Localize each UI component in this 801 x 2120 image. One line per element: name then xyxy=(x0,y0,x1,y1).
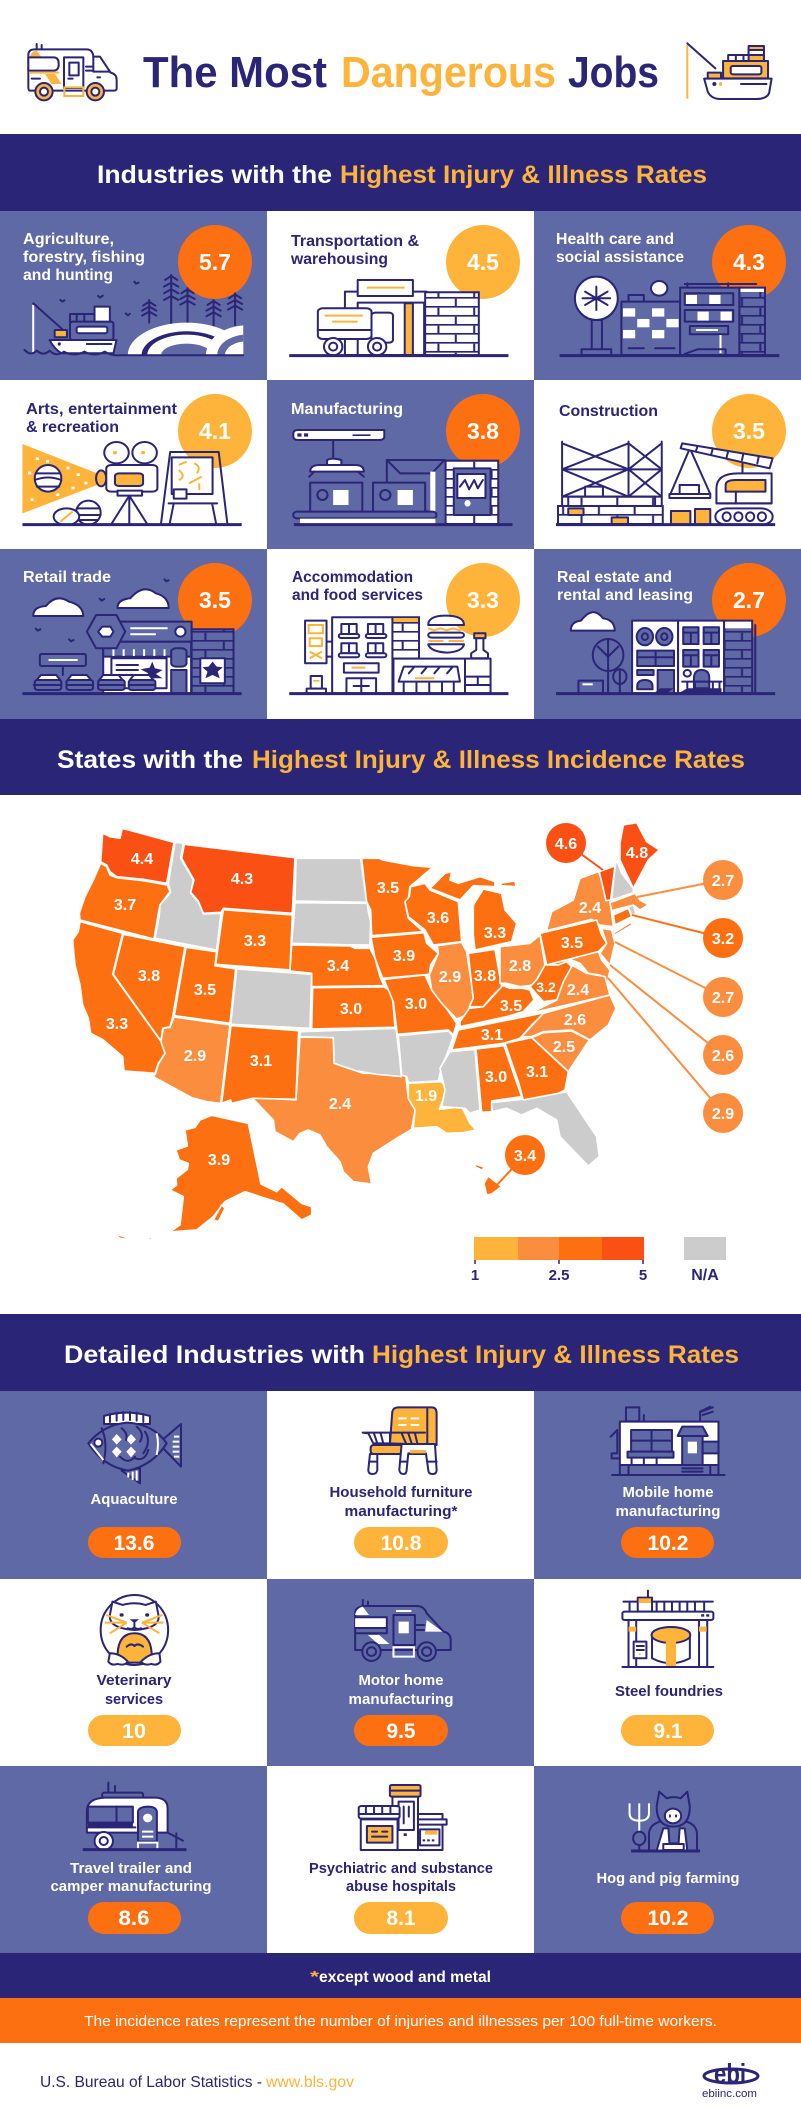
footnote band xyxy=(0,1953,801,1998)
state rate labels: 3.1 xyxy=(250,1053,272,1070)
state rate labels xyxy=(106,845,648,1169)
state rate labels: 3.5 xyxy=(561,935,583,952)
panel: household furniture manufacturing: manufacturing* xyxy=(344,1503,458,1520)
footnote band: * xyxy=(310,1969,320,1986)
callouts for small states: 2.7 xyxy=(712,990,734,1007)
panel: aquaculture xyxy=(0,1391,267,1579)
panel: real estate and rental and leasing: Real estate and xyxy=(557,569,672,586)
icon: movie camera, ball and easel xyxy=(22,442,242,525)
panel: mobile home manufacturing: manufacturing xyxy=(616,1503,720,1520)
title: Dangerous xyxy=(341,48,556,97)
source: U.S. Bureau of Labor Statistics - xyxy=(40,2074,262,2091)
icon: fishing boat xyxy=(687,43,772,99)
panel: arts, entertainment and recreation: & recreation xyxy=(26,419,119,436)
heading: states: States with the xyxy=(57,746,243,774)
panel: veterinary services xyxy=(88,1595,181,1746)
state rate labels: 3.3 xyxy=(484,925,506,942)
panel: transportation and warehousing xyxy=(289,225,520,356)
panel: real estate and rental and leasing: rental and leasing xyxy=(557,587,693,604)
panel: retail trade xyxy=(0,549,267,719)
state rate labels: 3.9 xyxy=(208,1152,230,1169)
pill: 9.1: 9.1 xyxy=(654,1720,683,1743)
state rate labels: 2.4 xyxy=(329,1096,351,1113)
panel: motor home manufacturing: manufacturing xyxy=(348,1691,454,1708)
state rate labels: 2.4 xyxy=(579,900,601,917)
icon: pill bottles xyxy=(359,1785,447,1850)
state rate labels: 4.3 xyxy=(231,871,253,888)
icon: apartment buildings xyxy=(556,612,775,694)
icon: mobile home xyxy=(611,1407,725,1475)
pill: 9.1 xyxy=(621,1715,714,1746)
panel: transportation and warehousing: 4.5 xyxy=(467,249,499,275)
panel: accommodation and food services: Accommodation xyxy=(292,569,413,586)
icon: scaffold and excavator xyxy=(556,442,775,525)
panel: household furniture manufacturing xyxy=(330,1407,472,1558)
panel: hog and pig farming xyxy=(534,1766,801,1953)
panel: real estate and rental and leasing xyxy=(534,549,801,719)
panel: health care and social assistance: social assistance xyxy=(556,249,684,266)
panel: health care and social assistance: 4.3 xyxy=(733,249,765,275)
panel: motor home manufacturing xyxy=(267,1579,534,1766)
icon: hotel and restaurant xyxy=(289,616,508,694)
panel: health care and social assistance: Health care and xyxy=(556,231,674,248)
panel: household furniture manufacturing: Household furniture xyxy=(330,1484,472,1501)
state rate labels: 3.1 xyxy=(481,1027,503,1044)
panel: agriculture, forestry, fishing and hunting: Agriculture, xyxy=(23,231,114,248)
panel: arts, entertainment and recreation: Arts, entertainment xyxy=(26,401,178,418)
state rate labels: 3.5 xyxy=(500,998,522,1015)
state rate labels: 3.0 xyxy=(485,1069,507,1086)
legend: N/A xyxy=(691,1267,719,1284)
footnote band: except wood and metal xyxy=(319,1969,491,1986)
heading: detailed industries: Detailed Industries with xyxy=(64,1341,365,1369)
icon: motor home xyxy=(355,1600,451,1661)
panel: agriculture, forestry, fishing and hunting xyxy=(0,211,288,380)
icon: travel trailer xyxy=(83,1783,187,1850)
icon: pig with pitchfork xyxy=(630,1792,700,1851)
panel: travel trailer and camper manufacturing: Travel trailer and xyxy=(70,1860,192,1877)
heading: industries: Industries with the xyxy=(97,161,332,189)
pill: 10.8: 10.8 xyxy=(380,1532,422,1555)
source: www.bls.gov xyxy=(265,2074,354,2091)
panel: psychiatric and substance abuse hospitals: abuse hospitals xyxy=(346,1878,456,1895)
note band xyxy=(0,1998,801,2043)
panel: steel foundries xyxy=(615,1591,723,1746)
state rate labels: 3.5 xyxy=(377,880,399,897)
state rate labels: 1.9 xyxy=(415,1088,437,1105)
icon: foundry crucible xyxy=(622,1591,713,1667)
panel: agriculture, forestry, fishing and hunting: and hunting xyxy=(23,267,113,284)
title: Jobs xyxy=(568,48,659,97)
callouts for small states: 3.4 xyxy=(514,1148,536,1165)
logo: ebi: ebi xyxy=(714,2058,746,2089)
callouts for small states: 4.6 xyxy=(555,836,577,853)
pill: 9.5 xyxy=(354,1715,448,1746)
state rate labels: 3.9 xyxy=(393,948,415,965)
panel: construction xyxy=(556,394,786,525)
pill: 10.2 xyxy=(621,1527,714,1558)
icon: fish xyxy=(88,1412,181,1483)
icon: chair xyxy=(363,1407,437,1474)
state rate labels: 3.4 xyxy=(327,958,349,975)
state rate labels: 3.3 xyxy=(244,933,266,950)
panel: retail trade: Retail trade xyxy=(23,569,111,586)
heading: industries xyxy=(0,134,801,211)
panel: construction: Construction xyxy=(559,403,658,420)
callouts for small states: 2.6 xyxy=(712,1048,734,1065)
state rate labels: 3.2 xyxy=(536,979,556,995)
pill: 10.8 xyxy=(354,1527,448,1558)
panel: health care and social assistance xyxy=(534,211,801,380)
state rate labels: 3.7 xyxy=(114,897,136,914)
state rate labels: 4.4 xyxy=(131,851,153,868)
note band: The incidence rates represent the number of injuries and illnesses per 100 full-time workers. xyxy=(84,2013,717,2030)
heading: states: Highest Injury & Illness Incidence Rates xyxy=(252,746,745,774)
pill: 10 xyxy=(88,1715,181,1746)
icon: cat xyxy=(101,1595,168,1665)
icon: factory machines xyxy=(293,430,513,525)
pill: 10.2: 10.2 xyxy=(648,1532,688,1555)
legend: 1 xyxy=(471,1267,479,1284)
pill: 8.6: 8.6 xyxy=(118,1907,150,1930)
icon: hospital buildings xyxy=(560,277,779,356)
heading: industries: Highest Injury & Illness Rates xyxy=(340,161,707,189)
title: The Most xyxy=(143,48,327,97)
pill: 13.6: 13.6 xyxy=(114,1532,154,1555)
panel: accommodation and food services: 3.3 xyxy=(467,587,499,613)
panel: retail trade: 3.5 xyxy=(199,587,231,613)
panel: transportation and warehousing: warehousing xyxy=(290,251,388,268)
panel: veterinary services: services xyxy=(105,1691,163,1708)
pill: 10.2: 10.2 xyxy=(648,1907,688,1930)
panel: hog and pig farming: Hog and pig farming xyxy=(596,1870,740,1887)
heading: detailed industries xyxy=(0,1314,801,1391)
icon: motor home xyxy=(28,44,117,100)
panel: manufacturing: 3.8 xyxy=(467,418,499,444)
panel: transportation and warehousing: Transportation & xyxy=(291,233,419,250)
panel: motor home manufacturing: Motor home xyxy=(358,1672,444,1689)
panel: accommodation and food services xyxy=(289,563,520,694)
state rate labels: 3.5 xyxy=(194,982,216,999)
legend: 2.5 xyxy=(549,1267,569,1284)
panel: real estate and rental and leasing: 2.7 xyxy=(733,587,765,613)
panel: travel trailer and camper manufacturing xyxy=(0,1766,267,1953)
state rate labels: 3.0 xyxy=(340,1001,362,1018)
state rate labels: 2.9 xyxy=(184,1048,206,1065)
legend xyxy=(471,1237,726,1284)
choropleth map of US states xyxy=(73,823,659,1241)
logo: ebi: ebiinc.com xyxy=(702,2088,757,2100)
icon: storefront xyxy=(22,579,242,694)
legend: 5 xyxy=(639,1267,647,1284)
heading: states xyxy=(0,719,801,795)
state rate labels: 3.8 xyxy=(138,968,160,985)
panel: manufacturing: Manufacturing xyxy=(291,401,403,418)
state rate labels: 3.0 xyxy=(405,996,427,1013)
pill: 13.6 xyxy=(88,1527,181,1558)
state rate labels: 3.3 xyxy=(106,1016,128,1033)
callouts for small states: 2.7 xyxy=(712,873,734,890)
pill: 8.1: 8.1 xyxy=(386,1907,416,1930)
panel: arts, entertainment and recreation: 4.1 xyxy=(199,418,231,444)
panel: aquaculture: Aquaculture xyxy=(90,1491,178,1508)
logo: ebi xyxy=(702,2058,758,2100)
panel: arts, entertainment and recreation xyxy=(22,394,252,525)
state rate labels: 2.9 xyxy=(439,969,461,986)
callouts for small states: 3.2 xyxy=(712,931,734,948)
state rate labels: 4.8 xyxy=(626,845,648,862)
pill: 8.1 xyxy=(354,1902,448,1934)
callouts for small states xyxy=(495,823,743,1187)
pill: 9.5: 9.5 xyxy=(386,1720,416,1743)
state rate labels: 2.6 xyxy=(564,1012,586,1029)
pill: 10.2 xyxy=(621,1902,714,1934)
panel: construction: 3.5 xyxy=(733,418,765,444)
state rate labels: 3.8 xyxy=(474,968,496,985)
panel: travel trailer and camper manufacturing: camper manufacturing xyxy=(50,1878,212,1895)
panel: steel foundries: Steel foundries xyxy=(615,1683,723,1700)
panel: veterinary services: Veterinary xyxy=(96,1672,172,1689)
pill: 8.6 xyxy=(88,1902,181,1934)
state rate labels: 2.8 xyxy=(509,958,531,975)
state rate labels: 2.4 xyxy=(567,982,589,999)
panel: agriculture, forestry, fishing and hunting: 5.7 xyxy=(199,249,231,275)
callouts for small states: 2.9 xyxy=(712,1106,734,1123)
icon: truck and warehouse xyxy=(289,280,508,356)
state rate labels: 3.6 xyxy=(427,910,449,927)
panel: psychiatric and substance abuse hospitals: Psychiatric and substance xyxy=(309,1860,493,1877)
panel: mobile home manufacturing: Mobile home xyxy=(622,1484,714,1501)
panel: manufacturing xyxy=(267,380,534,549)
title xyxy=(143,48,659,97)
pill: 10: 10 xyxy=(122,1720,146,1743)
state rate labels: 3.1 xyxy=(526,1064,548,1081)
panel: agriculture, forestry, fishing and hunting: forestry, fishing xyxy=(23,249,145,266)
panel: psychiatric and substance abuse hospitals xyxy=(309,1785,493,1934)
icon: boat, hills and trees xyxy=(24,274,244,356)
heading: detailed industries: Highest Injury & Illness Rates xyxy=(372,1341,739,1369)
panel: mobile home manufacturing xyxy=(534,1391,801,1579)
state rate labels: 2.5 xyxy=(553,1039,575,1056)
panel: accommodation and food services: and food services xyxy=(292,587,423,604)
